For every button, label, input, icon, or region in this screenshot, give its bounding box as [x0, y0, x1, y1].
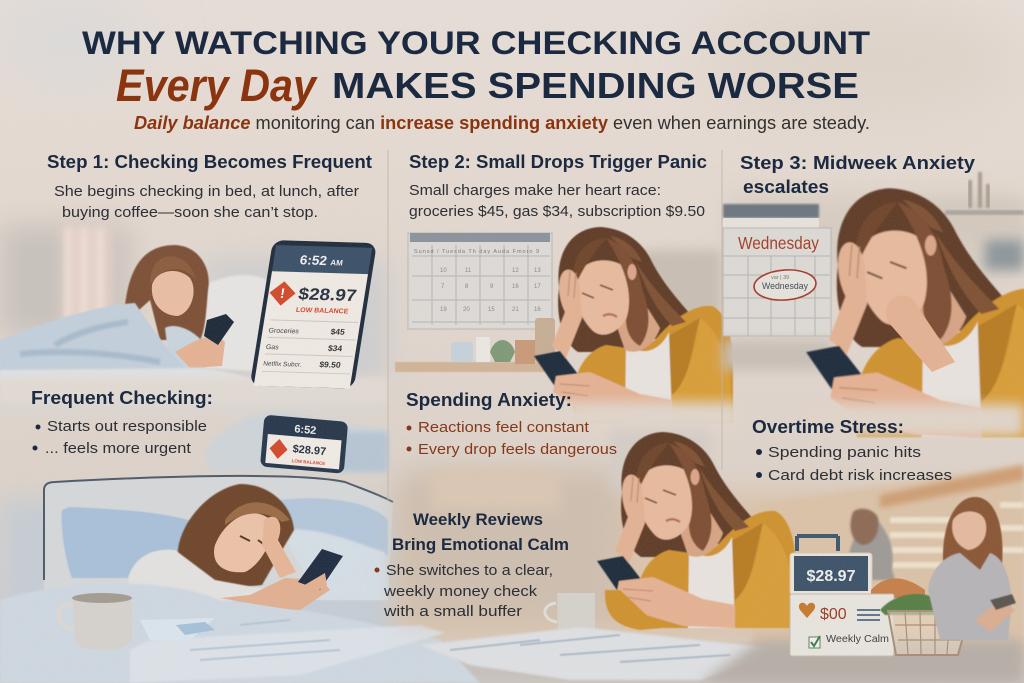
illustration: woman with calendar, step 3: [800, 188, 1024, 437]
phone: large balance screen: $45: [330, 327, 346, 337]
callout: weekly reviews: Bring Emotional Calm: [392, 536, 569, 554]
illustration: kitchen shelf and wall calendar: 15: [488, 307, 495, 313]
panel text: step 2: groceries $45, gas $34, subscription $9.50: [409, 203, 705, 220]
illustration: register, calm card and grocery basket: [790, 536, 970, 656]
illustration: kitchen shelf and wall calendar: 8: [465, 284, 469, 290]
illustration: kitchen shelf and wall calendar: 17: [534, 284, 541, 290]
panel text: step 1: Step 1: Checking Becomes Frequent: [47, 152, 372, 172]
illustration: kitchen shelf and wall calendar: 11: [465, 268, 472, 274]
panel text: step 2: [409, 152, 707, 220]
illustration: woman holding phone in store: [928, 497, 1016, 640]
callout: spending anxiety: Reactions feel constant: [418, 419, 590, 436]
illustration: Wednesday calendar: [723, 172, 1024, 370]
phone: large balance screen: Groceries: [268, 328, 300, 335]
phone: large balance screen: Gas: [265, 344, 280, 351]
phone: large balance screen: $28.97: [297, 285, 358, 305]
illustration: small phone on pillow: 6:52: [294, 423, 317, 437]
illustration: kitchen shelf and wall calendar: [395, 233, 722, 372]
illustration: woman checking phone in bed, morning: [0, 225, 390, 415]
callout: spending anxiety: [406, 390, 617, 458]
panel text: step 1: buying coffee—soon she can’t stop.: [62, 204, 318, 221]
illustration: small phone on pillow: LOW BALANCE: [291, 458, 325, 466]
panel text: step 3: Step 3: Midweek Anxiety: [740, 153, 975, 173]
illustration: kitchen shelf and wall calendar: 21: [512, 307, 519, 313]
illustration: register, calm card and grocery basket: Weekly Calm: [826, 633, 889, 645]
illustration: small phone on pillow: [205, 411, 388, 474]
illustration: kitchen shelf and wall calendar: 16: [534, 307, 541, 313]
callout: spending anxiety: Spending Anxiety:: [406, 390, 572, 410]
illustration: kitchen shelf and wall calendar: 12: [512, 268, 519, 274]
illustration: woman at table with phone: [597, 432, 796, 630]
panel text: step 2: Step 2: Small Drops Trigger Panic: [409, 152, 707, 172]
illustration: register, calm card and grocery basket: $28.97: [807, 568, 856, 585]
title: WHY WATCHING YOUR CHECKING ACCOUNT: [82, 25, 871, 61]
callout: overtime stress: Card debt risk increases: [768, 467, 952, 484]
illustration: papers on table: [420, 627, 1024, 683]
callout: frequent checking: Starts out responsible: [47, 418, 207, 435]
callout: frequent checking: ... feels more urgent: [45, 440, 192, 457]
callout: weekly reviews: [374, 511, 569, 620]
phone: large balance screen: $34: [327, 343, 343, 353]
illustration: woman lying in bed at night with phone: [0, 476, 480, 683]
callout: frequent checking: Frequent Checking:: [31, 388, 213, 408]
panel text: step 3: escalates: [743, 177, 829, 197]
phone: large balance screen: Netflix Subcr.: [263, 361, 302, 369]
phone: large balance screen: $9.50: [319, 359, 342, 370]
illustration: kitchen shelf and wall calendar: 16: [512, 284, 519, 290]
panel text: step 2: Small charges make her heart race:: [409, 182, 661, 199]
illustration: kitchen shelf and wall calendar: 19: [440, 307, 447, 313]
phone: large balance screen: [250, 240, 377, 389]
illustration: kitchen shelf and wall calendar: 13: [534, 268, 541, 274]
title: Every Day: [116, 60, 318, 111]
callout: weekly reviews: weekly money check: [383, 583, 538, 600]
panel text: step 1: She begins checking in bed, at lunch, after: [54, 183, 359, 200]
illustration: Wednesday calendar: Wednesday: [738, 233, 819, 253]
illustration: Wednesday calendar: var | 39: [771, 275, 789, 281]
illustration: register, calm card and grocery basket: $00: [820, 606, 847, 623]
phone: large balance screen: 6:52 AM: [299, 252, 345, 268]
callout: overtime stress: Spending panic hits: [768, 444, 921, 461]
illustration: woman at kitchen counter, step 2: [510, 227, 740, 432]
icon: coffee mug on table: [545, 593, 595, 634]
illustration: kitchen shelf and wall calendar: 9: [490, 284, 494, 290]
callout: overtime stress: Overtime Stress:: [752, 417, 904, 437]
illustration: Wednesday calendar: Wednesday: [762, 281, 808, 291]
illustration: kitchen shelf and wall calendar: 10: [440, 268, 447, 274]
phone: large balance screen: LOW BALANCE: [295, 307, 349, 315]
callout: weekly reviews: with a small buffer: [383, 603, 522, 620]
panel text: step 1: [47, 152, 372, 221]
callout: frequent checking: [31, 388, 213, 457]
callout: weekly reviews: Weekly Reviews: [413, 511, 543, 529]
title: [82, 25, 871, 111]
illustration: small phone on pillow: $28.97: [292, 443, 327, 458]
illustration: kitchen shelf and wall calendar: 20: [463, 307, 470, 313]
phone: large balance screen: !: [279, 285, 286, 301]
illustration: kitchen shelf and wall calendar: 7: [441, 284, 445, 290]
title: MAKES SPENDING WORSE: [332, 65, 859, 106]
illustration: kitchen shelf and wall calendar: Sunsd / Tuesda Th day Auda Fmoro 9: [414, 249, 539, 255]
callout: spending anxiety: Every drop feels dangerous: [418, 441, 617, 458]
illustration: grocery store background: [400, 430, 1024, 660]
icon: coffee mug: [58, 593, 132, 650]
subtitle: Daily balance monitoring can increase spending anxiety even when earnings are steady.: [134, 113, 870, 133]
callout: overtime stress: [752, 417, 952, 484]
callout: weekly reviews: She switches to a clear,: [386, 562, 553, 579]
panel text: step 3: [740, 153, 975, 197]
